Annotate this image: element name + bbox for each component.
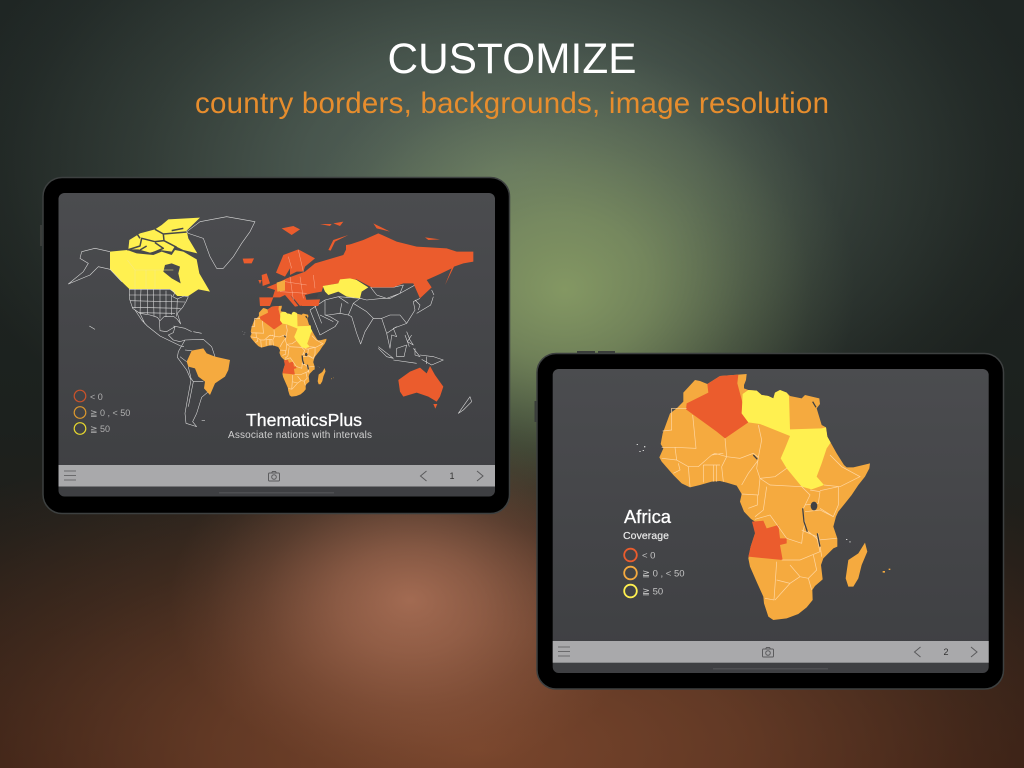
icon: menu (64, 471, 76, 480)
Americas outlines (68, 217, 255, 427)
icon: next (477, 471, 483, 481)
Kazakhstan (323, 278, 368, 298)
icon: camera (268, 472, 280, 481)
legend: < 0 (642, 550, 655, 562)
map subtitle: Associate nations with intervals (228, 430, 372, 441)
side and top buttons (536, 352, 615, 422)
Russia (305, 233, 473, 298)
legend (624, 549, 685, 598)
Brazil (187, 348, 230, 395)
icon: previous (420, 471, 426, 481)
legend: ≧ 50 (642, 586, 663, 598)
Canada inner borders (127, 260, 173, 288)
subtitle: country borders, backgrounds, image resolution (195, 87, 829, 120)
side button (40, 225, 42, 246)
Black Sea (305, 293, 318, 298)
tablet: world map (41, 178, 510, 514)
title: CUSTOMIZE (388, 35, 636, 82)
Iceland (243, 258, 254, 263)
home indicator (219, 492, 334, 494)
legend title: Coverage (623, 530, 669, 542)
Europe and Arctic islands (258, 222, 443, 409)
map title: Africa (624, 506, 672, 527)
tablet body (537, 354, 1004, 689)
page number: 2 (943, 647, 949, 657)
icon: previous (914, 647, 920, 657)
legend: ≧ 50 (90, 424, 110, 434)
legend: ≧ 0 , < 50 (90, 408, 130, 418)
map title: ThematicsPlus (246, 410, 362, 430)
Africa map (637, 374, 890, 620)
tablet body (43, 178, 510, 514)
Eurasia and Oceania (258, 222, 473, 413)
legend: < 0 (90, 392, 103, 402)
legend (74, 390, 130, 434)
screen (553, 369, 989, 673)
icon: menu (558, 647, 570, 656)
Africa (242, 306, 334, 397)
toolbar (553, 641, 989, 663)
legend: ≧ 0 , < 50 (642, 568, 685, 580)
Arctic channels (127, 228, 187, 253)
toolbar (58, 465, 495, 486)
world map (68, 217, 473, 427)
tablet: Africa map (536, 352, 1004, 689)
icon: next (971, 647, 977, 657)
icon: camera (762, 648, 774, 657)
European borders (280, 250, 315, 300)
Asia outlines (310, 285, 472, 413)
home indicator (713, 668, 828, 670)
Canada (110, 218, 210, 296)
screen (58, 193, 495, 496)
page number: 1 (449, 471, 455, 481)
France (277, 280, 285, 292)
